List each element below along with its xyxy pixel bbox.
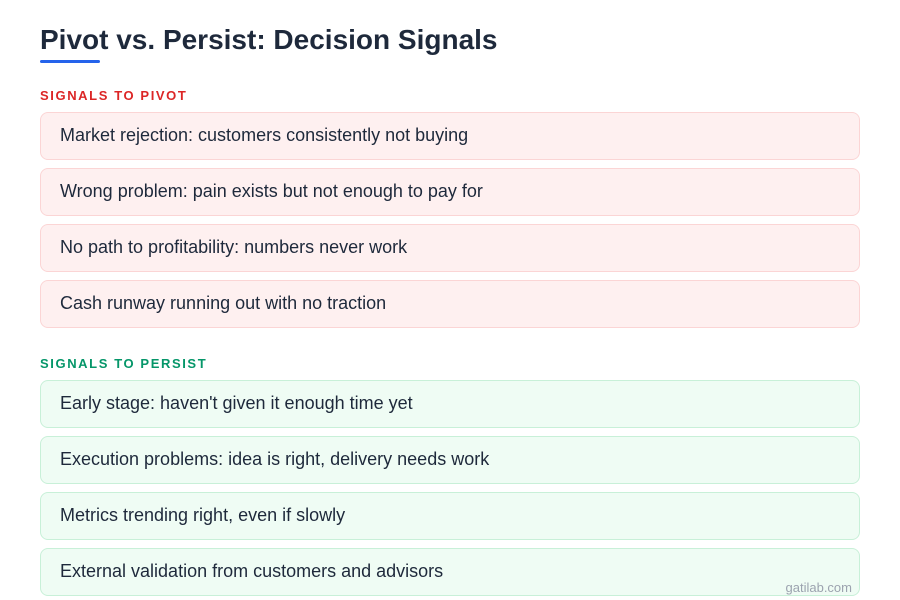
item: external validation [40, 548, 860, 596]
item: external validation: External validation from customers and advisors [60, 561, 443, 581]
item: metrics trending [40, 492, 860, 540]
item: early stage [40, 380, 860, 428]
item: wrong problem [40, 168, 860, 216]
item: cash runway: Cash runway running out with no traction [60, 293, 386, 313]
item: early stage: Early stage: haven't given it enough time yet [60, 393, 413, 413]
title underline [40, 60, 100, 63]
panel: pivot signals [40, 112, 860, 328]
item: cash runway [40, 280, 860, 328]
item: market rejection: Market rejection: customers consistently not buying [60, 125, 468, 145]
item: wrong problem: Wrong problem: pain exists but not enough to pay for [60, 181, 483, 201]
item: no path to profitability: No path to profitability: numbers never work [60, 237, 407, 257]
item: no path to profitability [40, 224, 860, 272]
item: execution problems: Execution problems: idea is right, delivery needs work [60, 449, 489, 469]
heading: signals to pivot: SIGNALS TO PIVOT [40, 88, 187, 103]
panel: persist signals [40, 380, 860, 596]
item: execution problems [40, 436, 860, 484]
title: Pivot vs. Persist: Decision Signals [40, 24, 498, 55]
watermark: gatilab.com [786, 580, 852, 595]
item: metrics trending: Metrics trending right, even if slowly [60, 505, 345, 525]
item: market rejection [40, 112, 860, 160]
heading: signals to persist: SIGNALS TO PERSIST [40, 356, 207, 371]
